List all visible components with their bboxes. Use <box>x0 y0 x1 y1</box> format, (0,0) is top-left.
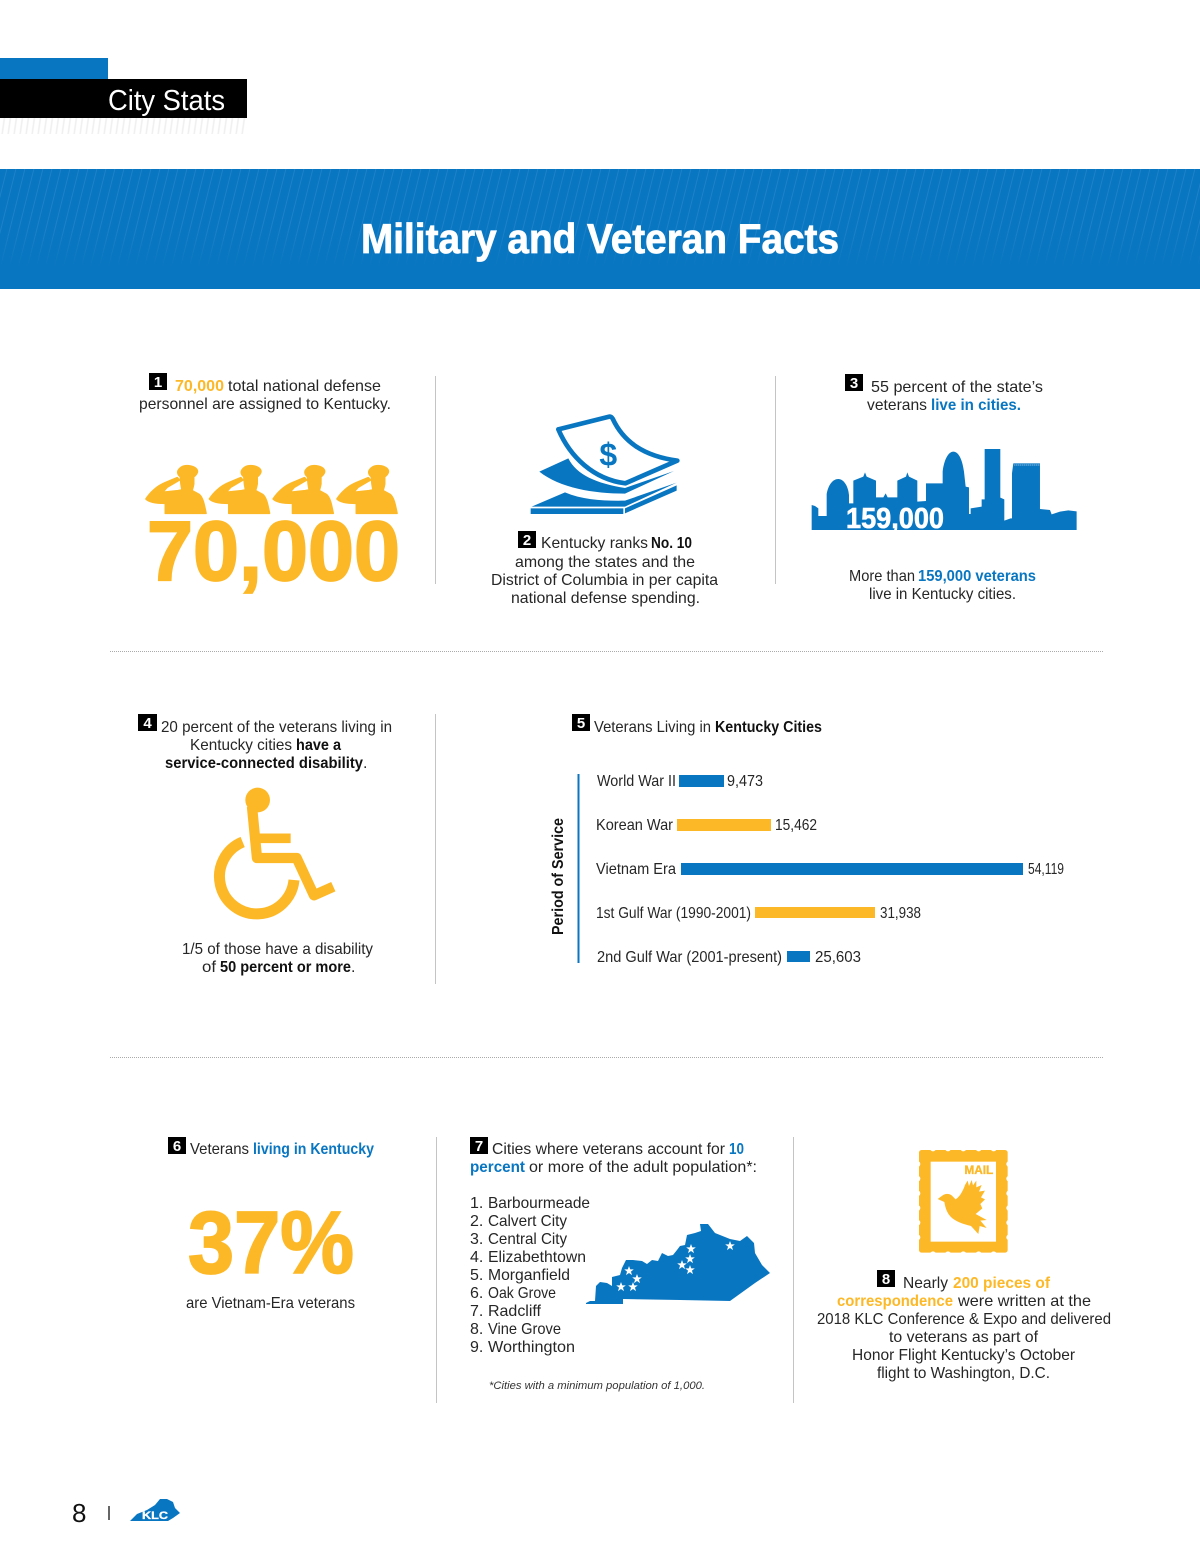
icon: postage stamp with dove <box>914 1145 1012 1257</box>
list of cities: Radcliff <box>488 1303 542 1320</box>
list of cities: Central City <box>488 1231 567 1248</box>
icon: wheelchair <box>219 788 333 914</box>
list of cities: Calvert City <box>488 1213 567 1230</box>
text: disability rating <box>182 941 373 976</box>
text: defense personnel: total national defense <box>228 378 381 395</box>
text: per capita spending: No. 10 <box>651 535 692 552</box>
panel 2: defense spending <box>491 417 718 607</box>
text: per capita spending <box>491 535 718 607</box>
text: disability percent: 20 percent of the veterans living in <box>161 719 392 736</box>
list of cities: Elizabethtown <box>488 1249 586 1266</box>
list of cities: Vine Grove <box>488 1321 561 1338</box>
title banner <box>0 169 1200 289</box>
text: correspondence: 2018 KLC Conference & Expo and delivered <box>817 1311 1111 1328</box>
panel 1: defense personnel <box>139 373 400 598</box>
text: disability percent <box>161 719 392 772</box>
text: disability rating: 1/5 of those have a disability <box>182 941 373 958</box>
list of cities: 9. <box>470 1339 483 1356</box>
section tab: City Stats: City Stats <box>108 85 225 117</box>
chart heading: Veterans Living in <box>594 719 711 736</box>
text: percent in cities: live in cities. <box>931 397 1021 414</box>
text: per capita spending: District of Columbia in per capita <box>491 572 718 589</box>
icon: four saluting soldiers <box>146 466 397 513</box>
bar chart <box>550 773 1064 966</box>
list of cities: 4. <box>470 1249 483 1266</box>
bar: World War II <box>597 773 763 790</box>
number badge 4 <box>138 714 157 732</box>
number badge 8 <box>877 1270 895 1288</box>
page number: 8 <box>72 1498 86 1528</box>
bar: 2nd Gulf War: 25,603 <box>815 949 861 966</box>
text: correspondence: correspondence <box>837 1293 953 1310</box>
number badge 7 <box>470 1137 488 1155</box>
bar: World War II: World War II <box>597 773 676 790</box>
icon: stack of money <box>531 417 677 514</box>
text: defense personnel: personnel are assigned to Kentucky. <box>139 396 391 413</box>
text: correspondence <box>817 1275 1111 1382</box>
heading text <box>470 1141 757 1176</box>
text: disability rating: 50 percent or more <box>220 959 351 976</box>
bar: Vietnam Era: Vietnam Era <box>596 861 676 878</box>
list of cities: 3. <box>470 1231 483 1248</box>
bar: 1st Gulf War: 1st Gulf War (1990-2001) <box>596 905 751 922</box>
number badge 6 <box>168 1137 186 1155</box>
footnote: *Cities with a minimum population of 1,000. <box>489 1380 705 1392</box>
heading text: living in Kentucky <box>253 1141 374 1158</box>
icon: city skyline with 159,000: 159,000 <box>846 503 944 535</box>
heading text <box>190 1141 374 1158</box>
text: disability percent: Kentucky cities <box>190 737 292 754</box>
list of cities: 1. <box>470 1195 483 1212</box>
text: correspondence: flight to Washington, D.C. <box>877 1365 1050 1382</box>
text: per capita spending: national defense spending. <box>511 590 700 607</box>
text: correspondence: were written at the <box>957 1293 1091 1310</box>
title banner: Military and Veteran Facts <box>361 215 839 262</box>
heading text: Veterans <box>190 1141 249 1158</box>
bar: 1st Gulf War: 31,938 <box>880 905 921 922</box>
text: veterans in cities: More than <box>849 568 915 585</box>
number badge 5 <box>572 714 590 732</box>
number badge 7: 7 <box>475 1138 483 1155</box>
text: defense personnel: 70,000 <box>175 378 224 395</box>
number badge 4: 4 <box>143 715 152 732</box>
list of cities: Barbourmeade <box>488 1195 590 1212</box>
list of cities: Worthington <box>488 1339 575 1356</box>
icon: stack of money: $ <box>599 436 617 472</box>
panel 3: veterans in cities <box>812 374 1077 603</box>
number badge 1 <box>149 373 167 391</box>
number badge 6: 6 <box>173 1138 181 1155</box>
panel 4: disability <box>138 714 392 976</box>
list of cities: 8. <box>470 1321 483 1338</box>
number badge 2: 2 <box>523 532 531 549</box>
chart heading <box>594 719 822 736</box>
panel 5: veterans by period of service <box>550 714 1064 966</box>
text: per capita spending: Kentucky ranks <box>541 535 648 552</box>
text: disability percent: service-connected disability <box>165 755 363 772</box>
big number 37%: 37% <box>188 1193 354 1292</box>
bar: Korean War: 15,462 <box>775 817 817 834</box>
text: veterans in cities: 159,000 veterans <box>918 568 1036 585</box>
text: percent in cities <box>867 379 1043 414</box>
text: veterans in cities <box>849 568 1036 603</box>
footer: page number and logo <box>72 1498 180 1528</box>
text: veterans in cities: live in Kentucky cities. <box>869 586 1016 603</box>
bar: Vietnam Era: 54,119 <box>1028 861 1064 878</box>
heading text: Cities where veterans account for <box>492 1141 726 1158</box>
panel 8: correspondence <box>817 1145 1111 1382</box>
bar: 1st Gulf War <box>596 905 921 922</box>
number badge 1: 1 <box>154 374 162 391</box>
list of cities: 2. <box>470 1213 483 1230</box>
heading text: or more of the adult population*: <box>529 1159 757 1176</box>
panel 6: veterans living in Kentucky <box>168 1137 374 1312</box>
big number 70,000: 70,000 <box>147 504 400 598</box>
text: percent in cities: 55 percent of the state’s <box>871 379 1043 396</box>
number badge 3: 3 <box>850 375 858 392</box>
list of cities: 5. <box>470 1267 483 1284</box>
bar: Korean War <box>596 817 817 834</box>
list of cities: 6. <box>470 1285 483 1302</box>
list of cities <box>470 1195 590 1356</box>
text: disability percent: have a <box>296 737 341 754</box>
text: disability rating: . <box>351 959 355 976</box>
bar: Vietnam Era <box>596 861 1064 878</box>
axis title: Period of Service <box>550 818 567 935</box>
icon: KLC logo: KLC <box>142 1510 168 1522</box>
chart heading: Kentucky Cities <box>715 719 822 736</box>
bar: Korean War: Korean War <box>596 817 674 834</box>
list of cities: Morganfield <box>488 1267 570 1284</box>
panel 7: cities with high veteran share <box>470 1137 770 1392</box>
heading text: percent <box>470 1159 526 1176</box>
number badge 8: 8 <box>882 1271 890 1288</box>
text: disability rating: of <box>202 959 217 976</box>
text: per capita spending: among the states and the <box>515 554 695 571</box>
text: correspondence: Nearly <box>903 1275 948 1292</box>
number badge 3 <box>845 374 863 392</box>
text: correspondence: to veterans as part of <box>889 1329 1039 1346</box>
text: correspondence: Honor Flight Kentucky’s October <box>852 1347 1076 1364</box>
number badge 2 <box>518 531 536 549</box>
text: disability percent: . <box>363 755 367 772</box>
list of cities: 7. <box>470 1303 483 1320</box>
section tab: City Stats <box>0 58 247 134</box>
bar: World War II: 9,473 <box>727 773 763 790</box>
text: defense personnel <box>139 378 391 413</box>
text: correspondence: 200 pieces of <box>953 1275 1051 1292</box>
caption: are Vietnam-Era veterans <box>186 1295 355 1312</box>
number badge 5: 5 <box>577 715 585 732</box>
icon: city skyline with 159,000 <box>812 449 1077 535</box>
text: percent in cities: veterans <box>867 397 927 414</box>
icon: postage stamp with dove: MAIL <box>964 1163 993 1177</box>
heading text: 10 <box>729 1141 744 1158</box>
bar: 2nd Gulf War: 2nd Gulf War (2001-present) <box>597 949 782 966</box>
list of cities: Oak Grove <box>488 1285 556 1302</box>
icon: Kentucky map with stars <box>586 1224 770 1304</box>
